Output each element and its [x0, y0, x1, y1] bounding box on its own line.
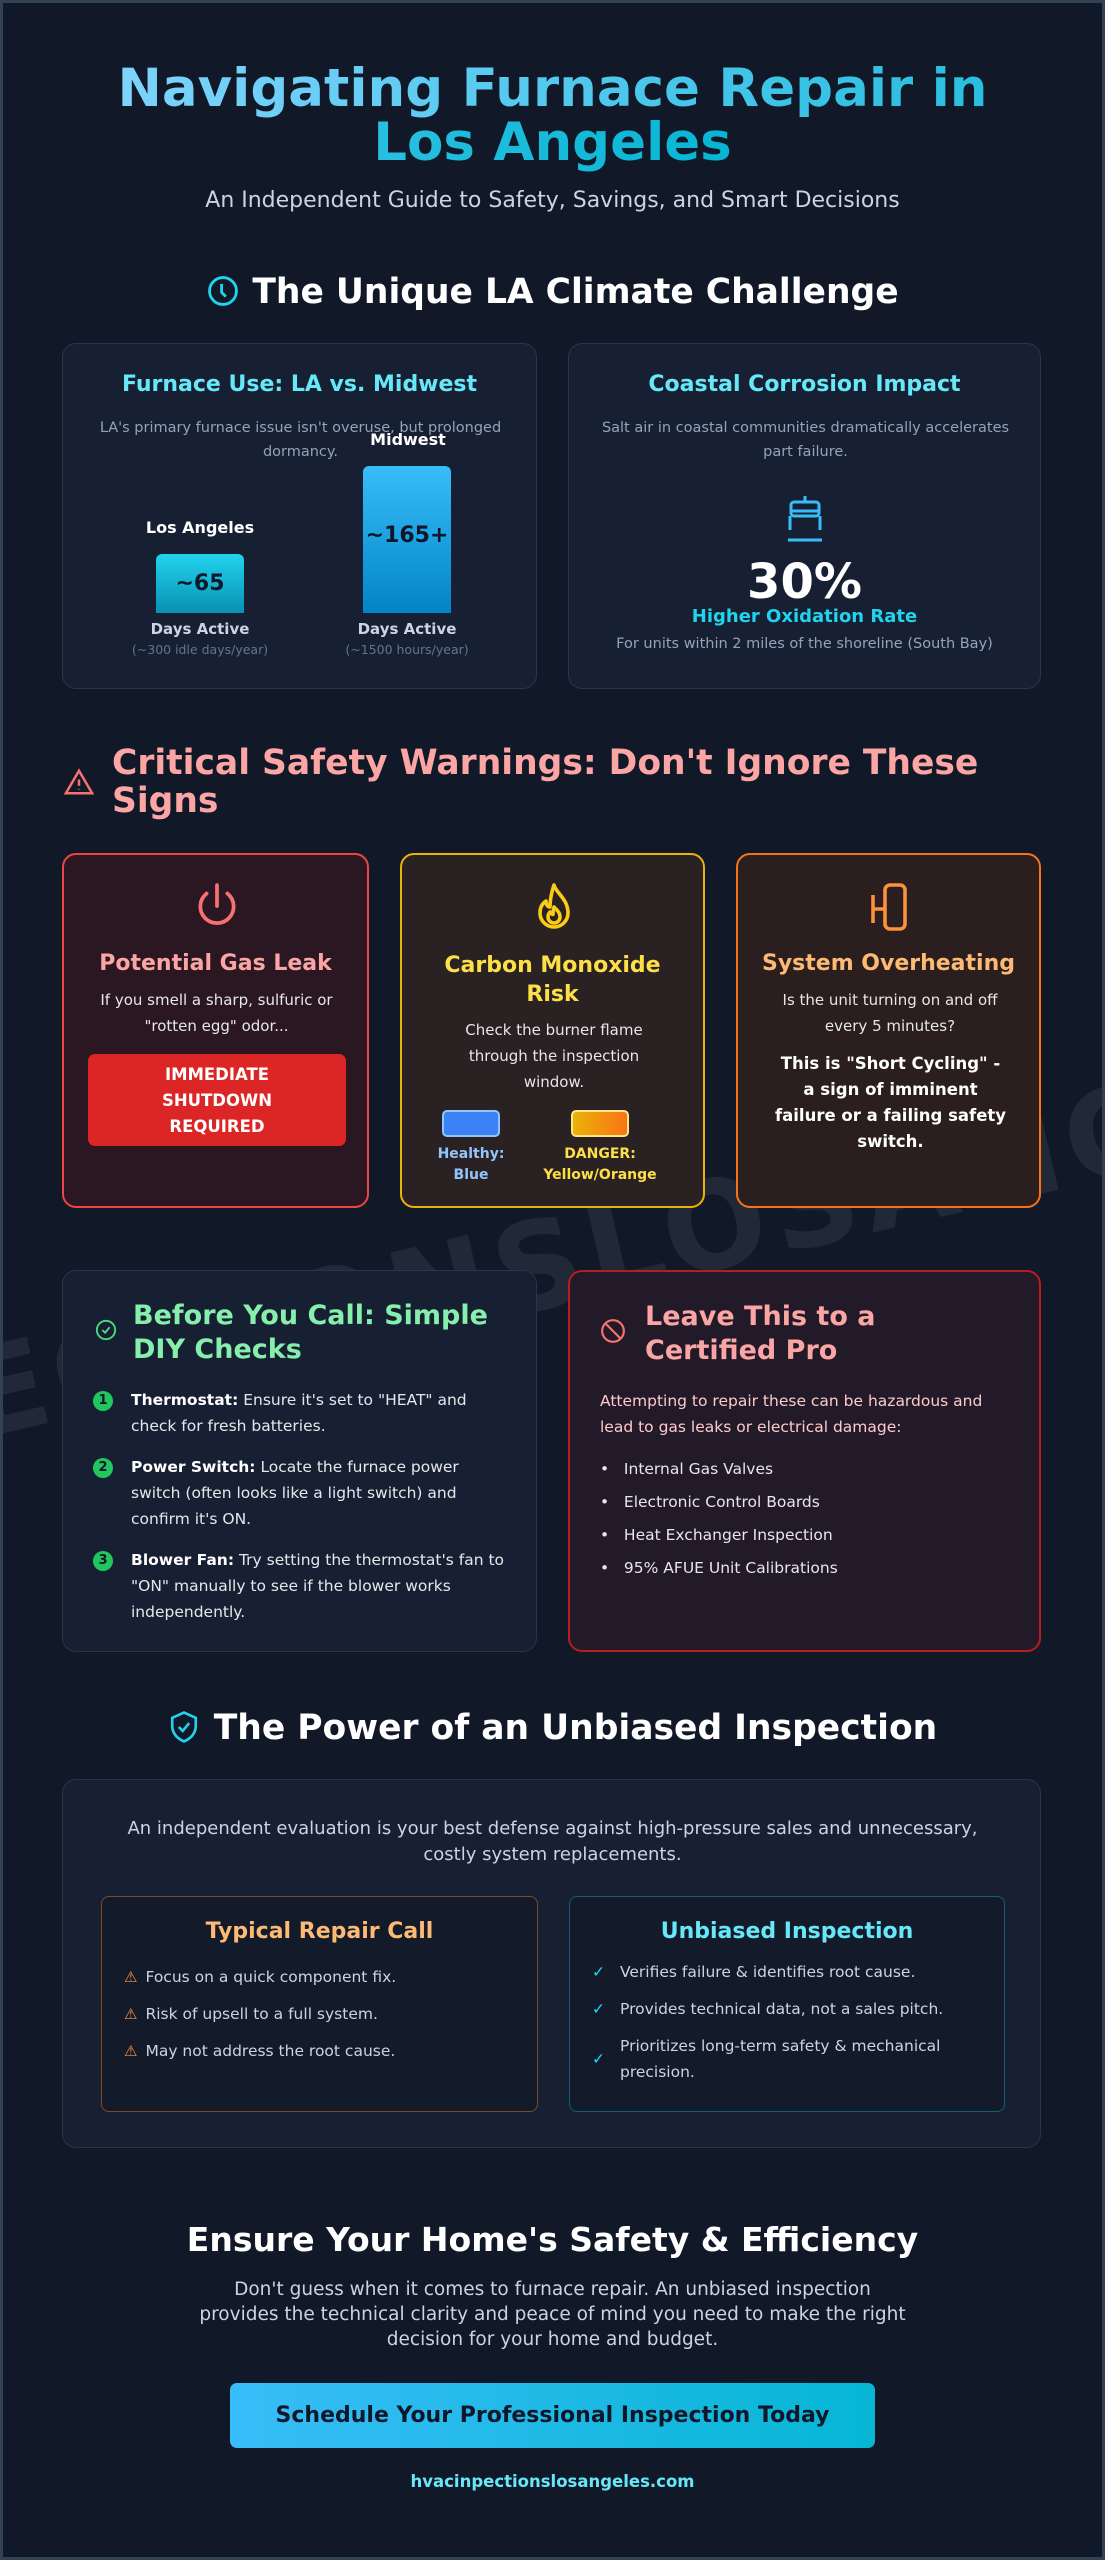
heading: climate challenge: The Unique LA Climate Challenge: [252, 272, 899, 312]
bar chart: Los Angeles: [146, 518, 254, 537]
panel: certified pro: [568, 1270, 1041, 1652]
panel: coastal corrosion: Coastal Corrosion Impact: [648, 372, 961, 397]
icon: flame: [538, 883, 570, 929]
list: pro tasks: • Internal Gas Valves: [600, 1460, 773, 1478]
title: Navigating Furnace Repair in: [117, 58, 988, 119]
bar chart: Days Active: [358, 620, 456, 638]
list: steps: 3: [98, 1553, 108, 1568]
list: pro tasks: [600, 1460, 838, 1577]
text: url: hvacinpectionslosangeles.com: [410, 2472, 694, 2491]
box: unbiased inspection: Prioritizes long-term safety & mechanical precision.: [620, 2037, 940, 2081]
box: typical repair: ⚠ May not address the root cause.: [124, 2042, 395, 2060]
callout: shutdown: IMMEDIATE: [165, 1065, 269, 1084]
box: unbiased inspection: ✓: [592, 2000, 605, 2018]
box: unbiased inspection: Unbiased Inspection: [661, 1919, 913, 1944]
panel: overheating: This is "Short Cycling" -: [781, 1054, 1000, 1073]
icon: unit: [871, 883, 907, 931]
panel: coastal corrosion: Salt air in coastal communities dramatically accelerates part failure.: [602, 420, 1009, 460]
heading: unbiased inspection: The Power of an Unbiased Inspection: [214, 1708, 937, 1748]
panel: overheating: [736, 853, 1041, 1208]
list: pro tasks: • 95% AFUE Unit Calibrations: [600, 1559, 838, 1577]
panel: overheating: System Overheating: [762, 951, 1015, 976]
list: steps: Blower Fan: Try setting the thermostat's fan to "ON" manually to see if the blower works independently.: [131, 1551, 504, 1621]
panel: overheating: a sign of imminent: [803, 1080, 978, 1099]
list: steps: 2: [98, 1460, 108, 1475]
bar chart: Days Active: [151, 620, 249, 638]
icon: power: [198, 883, 236, 925]
box: typical repair: ⚠ Risk of upsell to a full system.: [124, 2005, 378, 2023]
panel: gas leak: Potential Gas Leak: [99, 951, 332, 976]
box: unbiased inspection: ✓: [592, 1963, 605, 1981]
box: unbiased inspection: Provides technical data, not a sales pitch.: [620, 2000, 943, 2018]
icon: corroded unit: [788, 496, 822, 542]
bar chart: (~300 idle days/year): [132, 642, 268, 657]
bar chart: ~165+: [366, 523, 448, 548]
text: cta body: decision for your home and budget.: [387, 2329, 718, 2350]
list: pro tasks: • Heat Exchanger Inspection: [600, 1526, 833, 1544]
button: schedule: [230, 2383, 875, 2448]
panel: gas leak: If you smell a sharp, sulfuric or "rotten egg" odor...: [100, 991, 333, 1035]
panel: inspection comparison: An independent evaluation is your best defense against high-pressure sales and unnecessary, costly system replacements.: [127, 1818, 978, 1865]
panel: certified pro: Leave This to a Certified Pro: [645, 1301, 876, 1366]
icon: shield: [170, 1711, 198, 1743]
text: cta body: Don't guess when it comes to furnace repair. An unbiased inspection: [234, 2279, 871, 2300]
box: typical repair: ⚠ Focus on a quick component fix.: [124, 1968, 396, 1986]
legend: flame colors: Yellow/Orange: [543, 1167, 657, 1183]
bar chart: Midwest: [370, 430, 446, 449]
bar chart: ~65: [175, 571, 225, 596]
panel: carbon monoxide: Check the burner flame through the inspection window.: [465, 1021, 643, 1091]
box: typical repair: Typical Repair Call: [206, 1919, 433, 1944]
panel: furnace use chart: LA's primary furnace issue isn't overuse, but prolonged dormancy.: [100, 420, 501, 460]
panel: carbon monoxide: Risk: [526, 982, 579, 1007]
bar chart: (~1500 hours/year): [345, 642, 469, 657]
icon: check circle: [96, 1320, 116, 1340]
list: steps: 1: [98, 1393, 108, 1408]
callout: shutdown: [88, 1054, 346, 1146]
box: typical repair: [101, 1896, 538, 2112]
box: unbiased inspection: Verifies failure & identifies root cause.: [620, 1963, 915, 1981]
heading: call to action: Ensure Your Home's Safety & Efficiency: [187, 2220, 918, 2259]
panel: coastal corrosion: Higher Oxidation Rate: [692, 606, 917, 627]
list: pro tasks: • Electronic Control Boards: [600, 1493, 820, 1511]
box: unbiased inspection: [569, 1896, 1005, 2112]
callout: shutdown: SHUTDOWN: [162, 1091, 272, 1110]
list: steps: Thermostat: Ensure it's set to "HEAT" and check for fresh batteries.: [131, 1391, 467, 1435]
callout: shutdown: REQUIRED: [169, 1117, 265, 1136]
text: cta body: provides the technical clarity and peace of mind you need to make the right: [199, 2304, 906, 2325]
panel: overheating: Is the unit turning on and off every 5 minutes?: [783, 991, 997, 1035]
panel: furnace use chart: Furnace Use: LA vs. Midwest: [122, 372, 477, 397]
panel: carbon monoxide: Carbon Monoxide: [444, 953, 661, 978]
text: cta body: [199, 2279, 906, 2350]
list: steps: Power Switch: Locate the furnace power switch (often looks like a light switch) and confirm it's ON.: [131, 1458, 459, 1528]
panel: inspection comparison: [62, 1779, 1041, 2148]
panel: overheating: switch.: [857, 1132, 924, 1151]
panel: overheating: failure or a failing safety: [775, 1106, 1006, 1125]
title: [117, 58, 988, 173]
panel: DIY checks: Before You Call: Simple DIY Checks: [133, 1300, 488, 1365]
panel: carbon monoxide: [400, 853, 705, 1208]
legend: flame colors: Blue: [454, 1167, 488, 1183]
panel: furnace use chart: [62, 343, 537, 689]
panel: certified pro: Attempting to repair these can be hazardous and lead to gas leaks or electrical damage:: [600, 1392, 982, 1436]
legend: flame colors: DANGER:: [564, 1146, 636, 1162]
panel: gas leak: [62, 853, 369, 1208]
legend: flame colors: Healthy:: [438, 1146, 504, 1162]
icon: prohibited: [601, 1319, 625, 1343]
heading: safety warnings: Critical Safety Warnings: Don't Ignore These Signs: [112, 743, 978, 821]
subtitle: An Independent Guide to Safety, Savings, and Smart Decisions: [205, 188, 900, 213]
list: steps: [93, 1391, 504, 1621]
panel: coastal corrosion: 30%: [747, 554, 862, 610]
legend: flame colors: [438, 1110, 657, 1183]
title: Los Angeles: [373, 112, 732, 173]
panel: coastal corrosion: [568, 343, 1041, 689]
icon: clock: [208, 276, 238, 306]
panel: coastal corrosion: For units within 2 miles of the shoreline (South Bay): [616, 636, 993, 652]
bar chart: [132, 430, 469, 657]
icon: warning triangle: [64, 768, 94, 794]
box: unbiased inspection: ✓: [592, 2050, 605, 2068]
button: schedule: Schedule Your Professional Inspection Today: [276, 2403, 829, 2428]
panel: DIY checks: [62, 1270, 537, 1652]
